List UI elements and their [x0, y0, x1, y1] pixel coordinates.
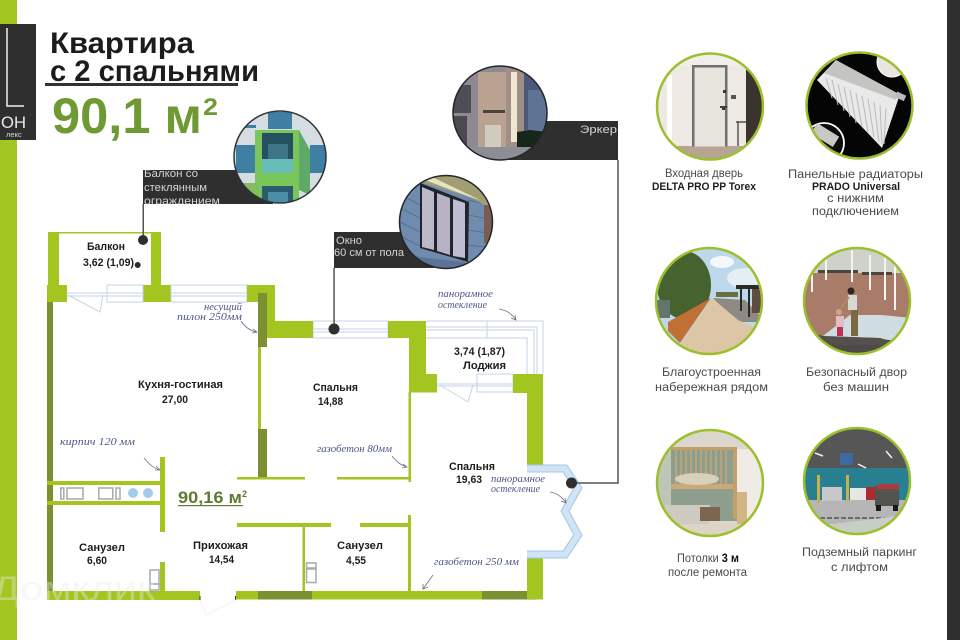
callout: balcony: Балкон со: [144, 168, 198, 180]
caption: yard: Безопасный двор: [806, 367, 907, 379]
logo block: лекс: [6, 130, 22, 139]
floor plan: [47, 232, 578, 615]
caption: embankment: Благоустроенная: [662, 367, 761, 379]
construction notes: кирпич 120 мм: [60, 437, 136, 448]
room labels: Спальня: [313, 382, 358, 394]
photo: radiator: [806, 52, 914, 158]
caption: yard: без машин: [823, 382, 889, 394]
room labels: 14,88: [318, 396, 343, 408]
left green strip: [0, 0, 17, 640]
logo block: ОН: [1, 113, 26, 132]
construction notes: газобетон 80мм: [317, 444, 393, 455]
caption: parking: Подземный паркинг: [802, 547, 917, 559]
construction notes: панорамное: [438, 289, 494, 300]
callout: bay window: [453, 66, 618, 488]
construction notes: остекление: [491, 484, 541, 495]
balcony walls: [47, 232, 171, 302]
room labels: 6,60: [87, 555, 107, 567]
caption: embankment: [655, 367, 768, 394]
construction notes: [60, 289, 566, 589]
caption: embankment: набережная рядом: [655, 382, 768, 394]
caption: radiator: [788, 169, 923, 218]
caption: radiator: подключением: [812, 206, 899, 218]
room labels: Балкон: [87, 241, 125, 253]
room labels: Лоджия: [463, 360, 506, 372]
callout: window: [328, 175, 493, 334]
plumbing right: [306, 563, 316, 582]
main walls: [47, 285, 543, 600]
caption: radiator: PRADO Universal: [812, 181, 900, 193]
room labels: Санузел: [79, 542, 125, 554]
feature: ceilings: [656, 429, 764, 579]
room labels: [79, 241, 506, 567]
callout: balcony: ограждением: [144, 196, 220, 208]
room labels: 4,55: [346, 555, 366, 567]
feature: parking: [802, 426, 917, 574]
photo: door: [656, 52, 764, 162]
glazing lines: [67, 285, 543, 402]
total area label: 2: [242, 489, 247, 499]
caption: ceilings: Потолки 3 м: [677, 553, 739, 565]
feature: door: [652, 52, 764, 193]
construction notes: газобетон 250 мм: [434, 557, 520, 568]
kitchen appliances: [61, 488, 153, 499]
room labels: Санузел: [337, 540, 383, 552]
feature: embankment: [654, 247, 768, 394]
feature: radiator: [788, 47, 923, 218]
entry door outline: [200, 600, 236, 615]
construction notes: несущий: [204, 302, 242, 313]
photo: parking: [802, 426, 912, 540]
caption: door: Входная дверь: [665, 168, 743, 180]
caption: door: [652, 168, 757, 193]
construction notes: остекление: [438, 300, 488, 311]
title: с 2 спальнями: [50, 55, 259, 88]
photo: ceilings: [656, 429, 764, 539]
room labels: 27,00: [162, 394, 188, 406]
construction notes: панорамное: [491, 474, 546, 485]
bay window: [527, 468, 578, 554]
construction notes: пилон 250мм: [177, 312, 243, 323]
photo: balcony: [234, 110, 326, 204]
area heading: 2: [203, 94, 218, 121]
room labels: Кухня-гостиная: [138, 379, 223, 391]
photo: bay window: [453, 66, 547, 160]
callout: bay window: Эркер: [580, 124, 617, 136]
caption: radiator: Панельные радиаторы: [788, 169, 923, 181]
caption: parking: [802, 547, 917, 574]
feature: yard: [802, 247, 912, 394]
photo: window: [399, 175, 493, 269]
room labels: 3,74 (1,87): [454, 346, 505, 358]
photo: yard: [802, 247, 912, 358]
callout: balcony: стеклянным: [144, 182, 207, 194]
caption: radiator: с нижним: [827, 193, 884, 205]
room labels: 3,62 (1,09): [83, 257, 134, 269]
title: Квартира: [50, 27, 194, 60]
caption: ceilings: [668, 553, 748, 579]
callout: window: 60 см от пола: [334, 247, 405, 259]
room labels: 19,63: [456, 474, 482, 486]
plumbing left: [150, 570, 159, 590]
area heading: 90,1 м: [52, 88, 202, 144]
caption: yard: [806, 367, 907, 394]
callout: window: Окно: [336, 235, 362, 247]
room labels: Спальня: [449, 461, 495, 473]
room labels: 14,54: [209, 554, 235, 566]
callout: balcony: [135, 110, 326, 268]
caption: door: DELTA PRO PP Torex: [652, 181, 757, 193]
room labels: Прихожая: [193, 540, 248, 552]
right dark strip: [947, 0, 960, 640]
total area label: 90,16 м: [178, 488, 242, 507]
title: [45, 27, 259, 88]
photo: embankment: [655, 249, 763, 353]
caption: ceilings: после ремонта: [668, 567, 748, 579]
caption: parking: с лифтом: [831, 562, 888, 574]
logo block: [0, 24, 36, 140]
